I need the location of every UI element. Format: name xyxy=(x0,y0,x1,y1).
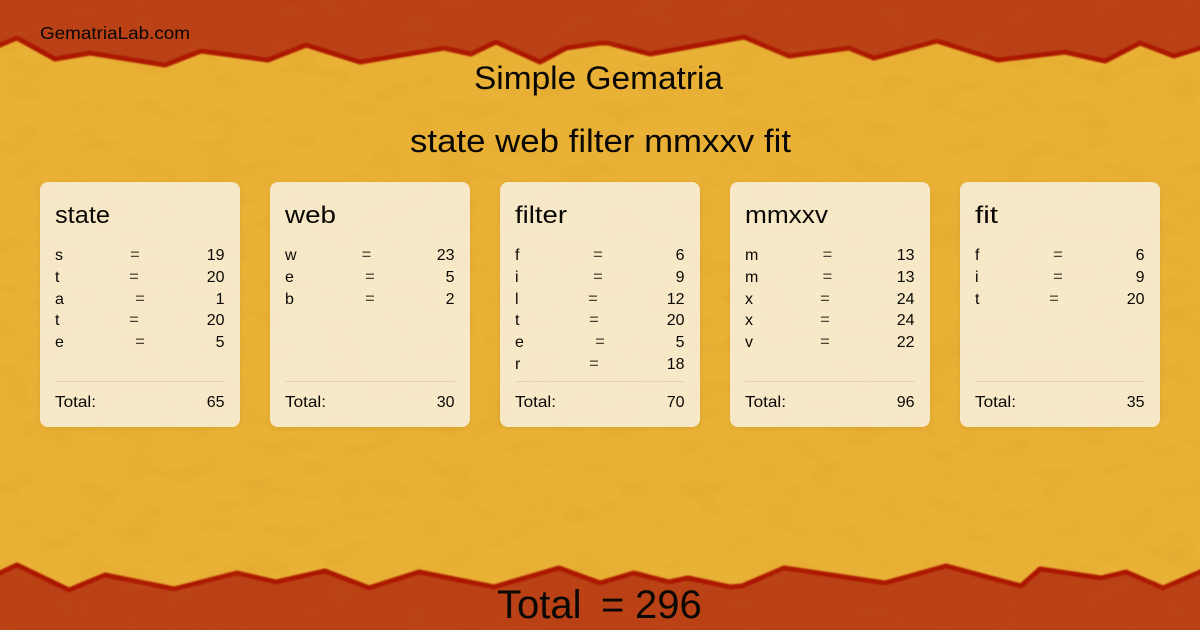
panel: state: 65 xyxy=(207,394,225,411)
panel: filter: = xyxy=(588,290,598,308)
panel: web: web xyxy=(284,202,336,229)
panel: state: 20 xyxy=(207,269,225,286)
panel: mmxxv: mmxxv xyxy=(745,202,828,229)
panel: filter: = xyxy=(593,268,603,286)
panel: filter: = xyxy=(593,246,603,264)
panel: mmxxv: m xyxy=(745,247,758,264)
panel: mmxxv: 13 xyxy=(897,269,915,286)
panel: fit: i xyxy=(975,269,979,286)
panel: filter: 6 xyxy=(676,247,685,264)
panel: filter: 20 xyxy=(667,312,685,329)
panel: mmxxv xyxy=(730,182,930,427)
panel: mmxxv: 24 xyxy=(897,291,915,308)
panel: fit: = xyxy=(1053,268,1063,286)
panel: web: = xyxy=(365,290,375,308)
panel: state: e xyxy=(55,334,64,351)
panel: filter: f xyxy=(515,247,520,264)
bottom red torn band xyxy=(0,560,1200,630)
panel: fit: 20 xyxy=(1127,291,1145,308)
panel: filter xyxy=(500,182,700,427)
panel: mmxxv: 24 xyxy=(897,312,915,329)
panel: web: 2 xyxy=(446,291,455,308)
panel: web: e xyxy=(285,269,294,286)
panel: mmxxv: = xyxy=(820,311,830,329)
panel: mmxxv: m xyxy=(745,269,758,286)
title: Simple Gematria xyxy=(474,60,723,96)
panel: filter: 9 xyxy=(676,269,685,286)
panel: web xyxy=(270,182,470,427)
panel: state: = xyxy=(135,333,145,351)
top red torn band xyxy=(0,0,1200,65)
panel: fit: 6 xyxy=(1136,247,1145,264)
panel: state: state xyxy=(55,202,110,229)
panel: state: 5 xyxy=(216,334,225,351)
panel: web: = xyxy=(365,268,375,286)
panel: fit: t xyxy=(975,291,980,308)
grand total: = xyxy=(601,583,624,627)
panel: state: 19 xyxy=(207,247,225,264)
panel: state: s xyxy=(55,247,63,264)
panel: filter: = xyxy=(589,311,599,329)
panel: mmxxv: v xyxy=(745,334,753,351)
panel: filter: 5 xyxy=(676,334,685,351)
panel: filter: = xyxy=(595,333,605,351)
panel: fit: 35 xyxy=(1127,394,1145,411)
panel: state: a xyxy=(55,291,64,308)
panel: mmxxv: 13 xyxy=(897,247,915,264)
grand total: Total xyxy=(497,583,582,627)
panel: filter: i xyxy=(515,269,519,286)
phrase: state web filter mmxxv fit xyxy=(410,123,791,159)
site name: GematriaLab.com xyxy=(40,23,190,43)
panel: mmxxv: x xyxy=(745,312,753,329)
panel: mmxxv: 96 xyxy=(897,394,915,411)
panel: state: = xyxy=(129,268,139,286)
panel: state: = xyxy=(135,290,145,308)
panel: state: Total: xyxy=(55,394,96,411)
panel: state xyxy=(40,182,240,427)
panel: web: b xyxy=(285,291,294,308)
panel: filter: Total: xyxy=(515,394,556,411)
panel: filter: t xyxy=(515,312,520,329)
panel: mmxxv: = xyxy=(823,246,832,264)
panel: mmxxv: Total: xyxy=(745,394,786,411)
panel: web: Total: xyxy=(285,394,326,411)
panel: mmxxv: = xyxy=(820,290,830,308)
panel: web: = xyxy=(362,246,371,264)
panel: mmxxv: = xyxy=(820,333,830,351)
panel: state: 1 xyxy=(216,291,225,308)
panel: filter: 70 xyxy=(667,394,685,411)
panel: fit: f xyxy=(975,247,980,264)
panel: mmxxv: 22 xyxy=(897,334,915,351)
panel: filter: filter xyxy=(515,202,567,229)
panel: filter: e xyxy=(515,334,524,351)
panel: filter: 18 xyxy=(667,356,685,373)
panel: fit: 9 xyxy=(1136,269,1145,286)
panel: fit xyxy=(960,182,1160,427)
panel: web: 30 xyxy=(437,394,455,411)
panel: filter: 12 xyxy=(667,291,685,308)
panel: filter: = xyxy=(589,355,599,373)
panel: state: = xyxy=(130,246,140,264)
panel: filter: r xyxy=(515,356,521,373)
panel: state: t xyxy=(55,269,60,286)
panel: fit: Total: xyxy=(975,394,1016,411)
panel: mmxxv: x xyxy=(745,291,753,308)
panel: filter: l xyxy=(515,291,519,308)
panel: web: w xyxy=(284,247,297,264)
panel: state: t xyxy=(55,312,60,329)
panel: web: 23 xyxy=(437,247,455,264)
panel: fit: fit xyxy=(975,202,998,229)
panel: mmxxv: = xyxy=(823,268,832,286)
panel: fit: = xyxy=(1049,290,1059,308)
panel: state: = xyxy=(129,311,139,329)
panel: state: 20 xyxy=(207,312,225,329)
grand total: 296 xyxy=(635,583,702,627)
panel: fit: = xyxy=(1053,246,1063,264)
panel: web: 5 xyxy=(446,269,455,286)
